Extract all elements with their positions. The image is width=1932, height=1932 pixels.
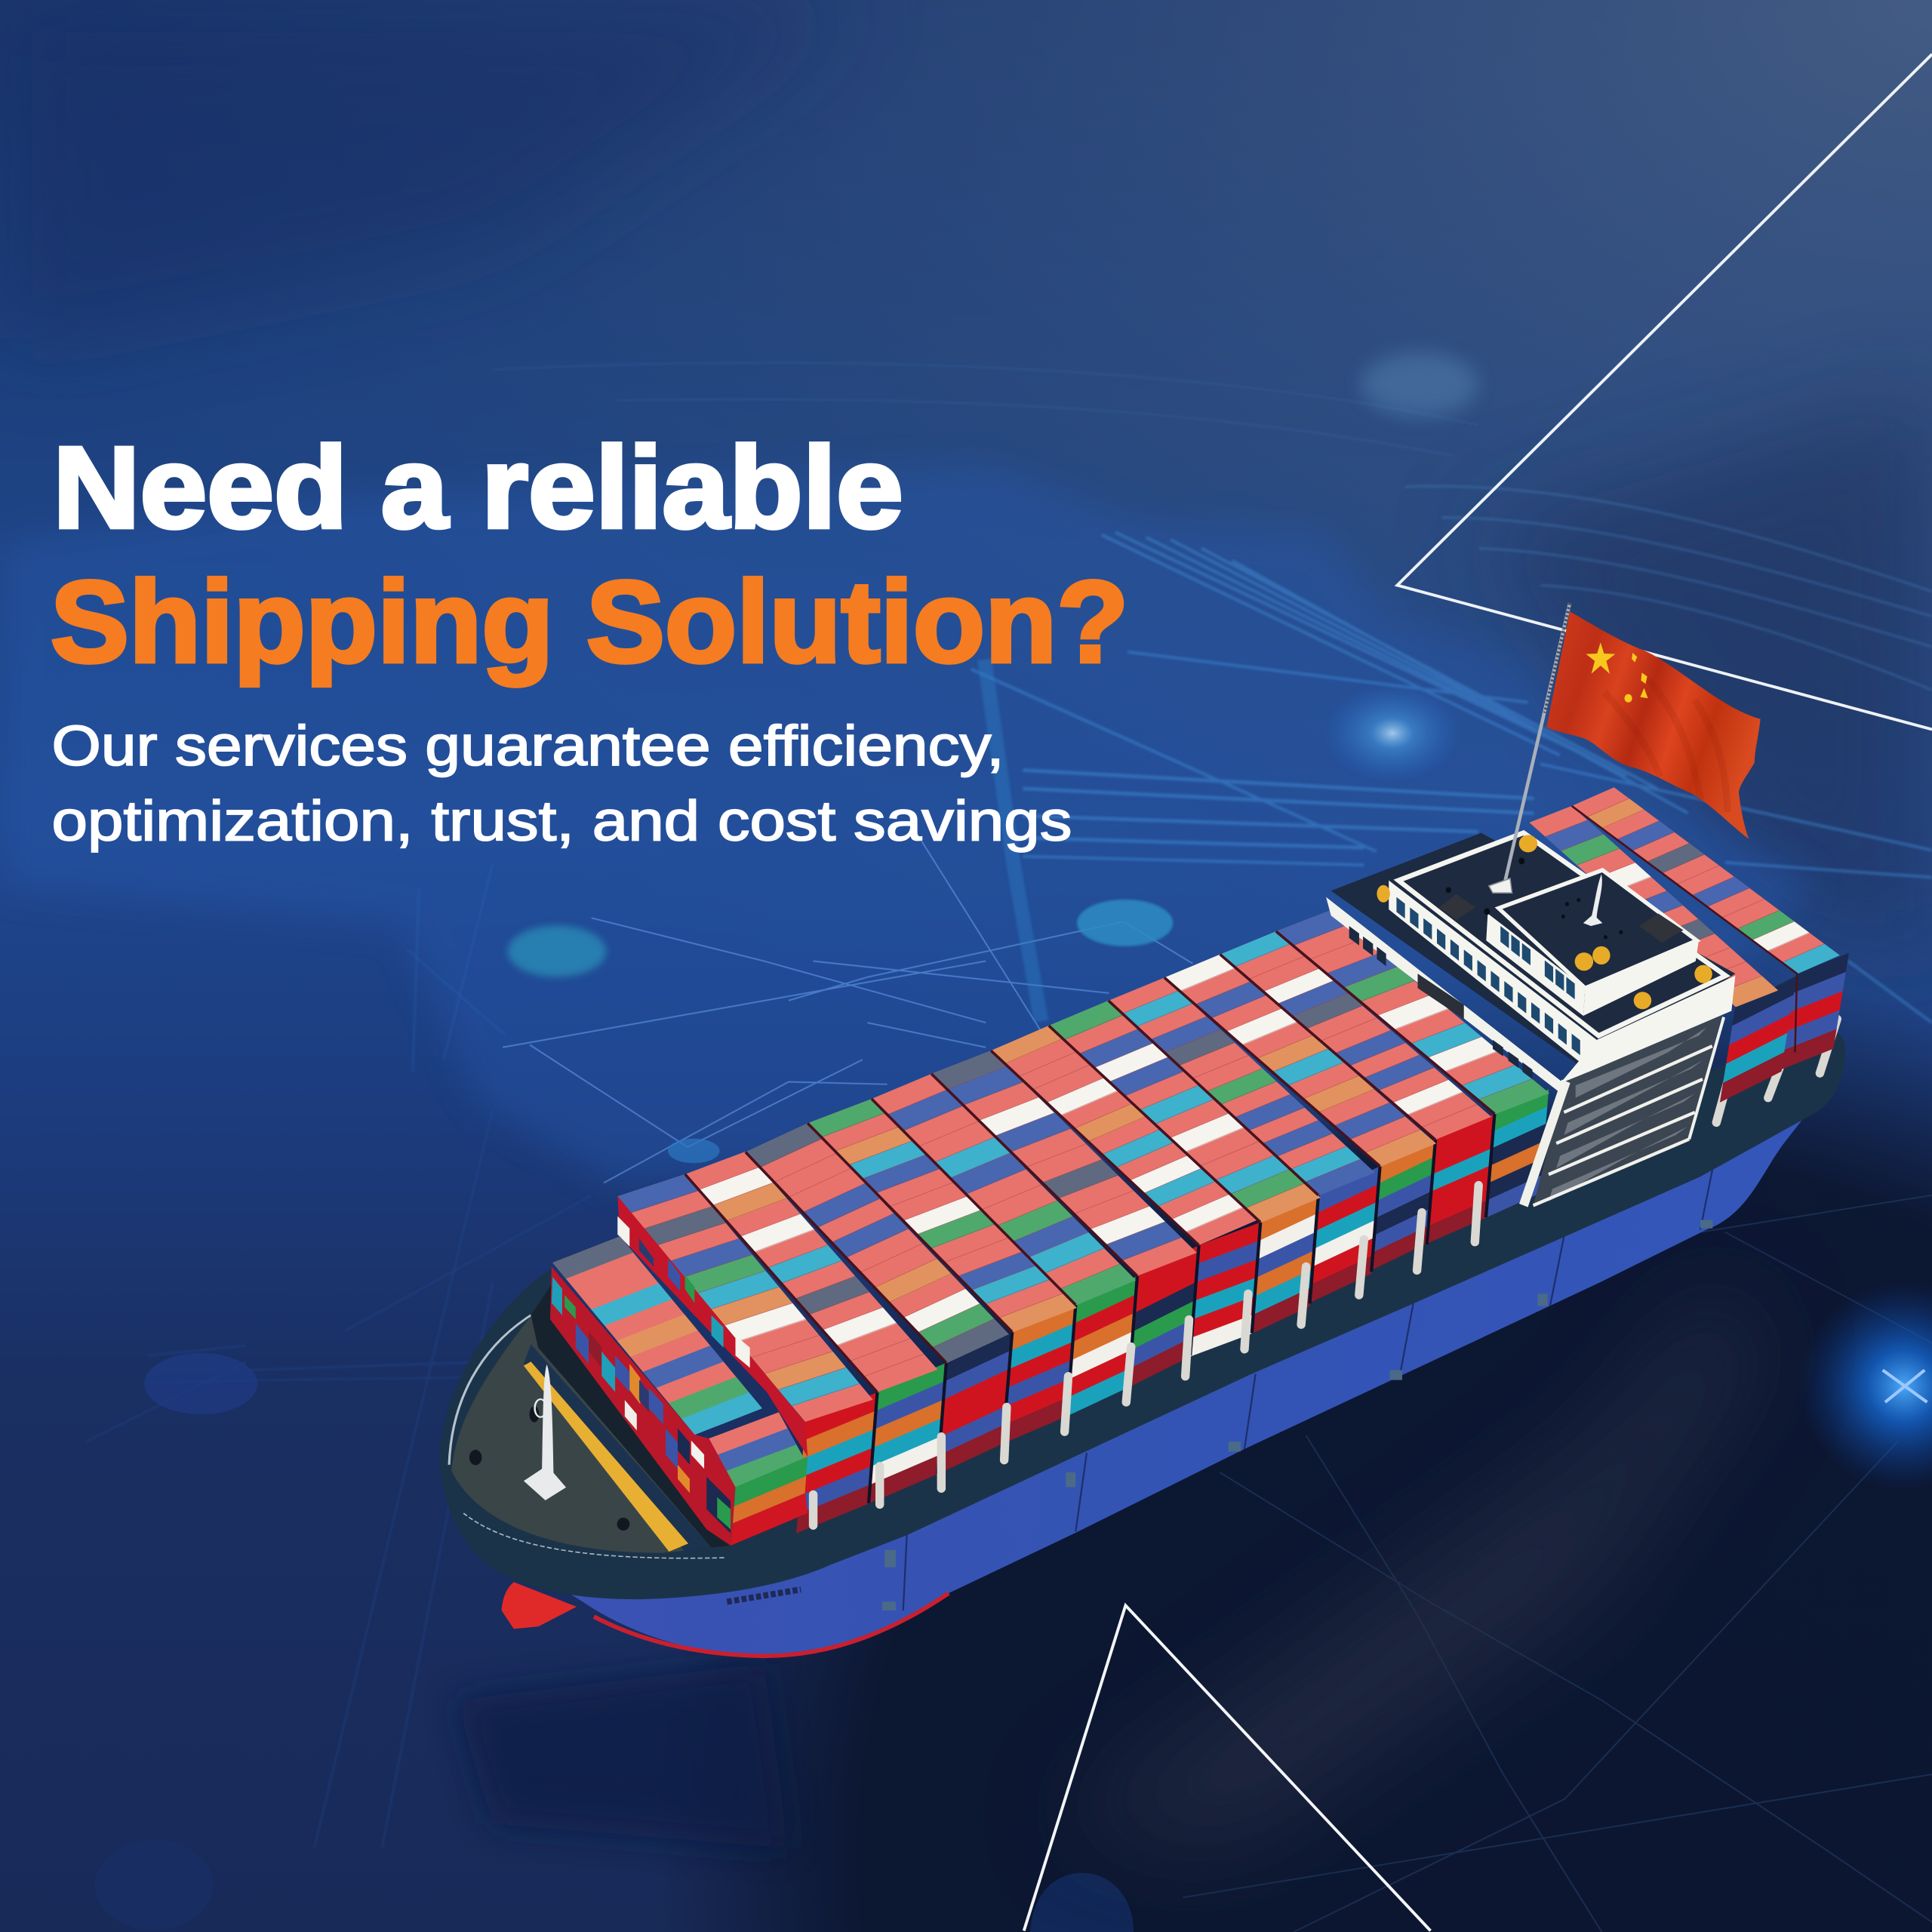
step face	[731, 1457, 808, 1546]
node: bright glow right	[1799, 1281, 1932, 1491]
tier three windows	[1500, 926, 1575, 999]
face 12	[1486, 1089, 1549, 1218]
stern face Q	[1782, 953, 1849, 1069]
network lines	[503, 826, 1192, 1183]
strip 11	[1220, 931, 1491, 1140]
strip 3	[746, 1123, 1009, 1363]
face 10	[1371, 1140, 1435, 1270]
strip 9	[1109, 977, 1375, 1195]
strip 5	[872, 1074, 1136, 1306]
hull panel seams	[903, 1168, 1712, 1611]
face 2	[869, 1363, 946, 1504]
tier three block	[1486, 870, 1699, 1016]
face 7	[1190, 1223, 1260, 1357]
inner rail	[449, 1315, 531, 1465]
node: small disc	[668, 1139, 719, 1163]
flag stars	[1586, 642, 1648, 703]
bow container stack	[550, 1196, 808, 1546]
dark side of stack base	[531, 1283, 731, 1548]
yellow domes	[1377, 835, 1712, 1009]
Chinese flag	[1546, 611, 1761, 839]
strip 1	[617, 1174, 873, 1422]
white bow mast	[524, 1364, 566, 1500]
strip 10	[1164, 955, 1436, 1167]
hull ports	[882, 1220, 1712, 1611]
face 4	[1003, 1305, 1075, 1444]
stern stacks	[1529, 787, 1849, 1103]
white triangle outline bottom	[1024, 1605, 1431, 1930]
strip 4	[808, 1099, 1077, 1332]
vents	[1439, 894, 1684, 943]
face 6	[1128, 1245, 1199, 1387]
heading line 1: Need a reliable	[53, 423, 903, 552]
node: faint disc bottom	[1030, 1873, 1134, 1932]
hull markings	[727, 1589, 801, 1601]
map: lit continent	[0, 467, 1815, 1183]
container top strips	[617, 910, 1549, 1422]
stern strip P	[1529, 806, 1778, 1007]
strip 2	[685, 1152, 937, 1392]
heading line 2: Shipping Solution?	[51, 557, 1129, 687]
node: glow top	[1360, 352, 1478, 417]
face 5	[1066, 1276, 1137, 1417]
stern face P	[1720, 976, 1797, 1103]
strip 6	[931, 1051, 1197, 1276]
node: glow mid right	[1321, 681, 1464, 785]
reflection haze below ship	[456, 1281, 1762, 1848]
flag pole	[1489, 603, 1570, 893]
sea streak lines	[493, 363, 1932, 690]
node: faint disc bottom left	[95, 1840, 213, 1930]
small black dots	[1446, 857, 1623, 940]
face 8	[1251, 1195, 1318, 1334]
stern and superstructure	[1326, 603, 1849, 1205]
dark hatch strip	[524, 1344, 712, 1552]
deck surface	[451, 1295, 731, 1553]
stern divider	[1572, 806, 1797, 1052]
bulbous bow	[501, 1582, 577, 1629]
tier two block	[1389, 833, 1735, 1083]
open lower decks frame	[1524, 1015, 1724, 1205]
faint lines lower right	[1183, 1195, 1932, 1932]
base plate	[1326, 833, 1735, 1096]
bollards	[469, 1406, 629, 1531]
faint lines lower left	[86, 863, 592, 1848]
step lower red	[731, 1493, 808, 1546]
lashing pegs	[814, 1019, 1837, 1525]
subtitle line 2: optimization, trust, and cost savings	[52, 789, 1072, 852]
node: disc near ship	[1077, 900, 1173, 946]
node: disc left	[508, 925, 606, 977]
face 1	[796, 1392, 877, 1534]
face 9	[1309, 1166, 1380, 1303]
container end faces	[796, 1089, 1549, 1534]
red waterline	[594, 1593, 949, 1656]
stern strip Q	[1572, 787, 1840, 974]
side of lower stack	[550, 1266, 736, 1546]
bow deck	[449, 1283, 731, 1558]
deck rim band	[440, 1017, 1845, 1599]
strip 12	[1276, 910, 1549, 1114]
hull	[542, 1066, 1844, 1656]
strip 8	[1049, 1001, 1321, 1223]
yellow bar	[524, 1361, 688, 1552]
lower stack top	[552, 1236, 762, 1435]
step top	[709, 1412, 805, 1487]
fan and horizontal light bands	[971, 532, 1932, 1023]
dark dividers between strips	[685, 931, 1494, 1392]
vertical light band	[984, 659, 1041, 1021]
subtitle line 1: Our services guarantee efficiency,	[52, 714, 1004, 777]
strip 7	[991, 1026, 1257, 1245]
white triangle outline top right	[1397, 54, 1932, 730]
dark gaps between faces	[869, 1114, 1494, 1503]
face 11	[1426, 1114, 1494, 1244]
rim dashes	[463, 1513, 726, 1558]
face 3	[937, 1332, 1012, 1474]
small mast	[1583, 874, 1602, 926]
tier two windows	[1396, 897, 1580, 1055]
side patches	[552, 1217, 750, 1534]
title and subtitle	[51, 423, 1129, 852]
side of upper stack	[617, 1196, 808, 1457]
node: faint disc lower left	[144, 1353, 257, 1414]
container ship	[440, 603, 1849, 1656]
